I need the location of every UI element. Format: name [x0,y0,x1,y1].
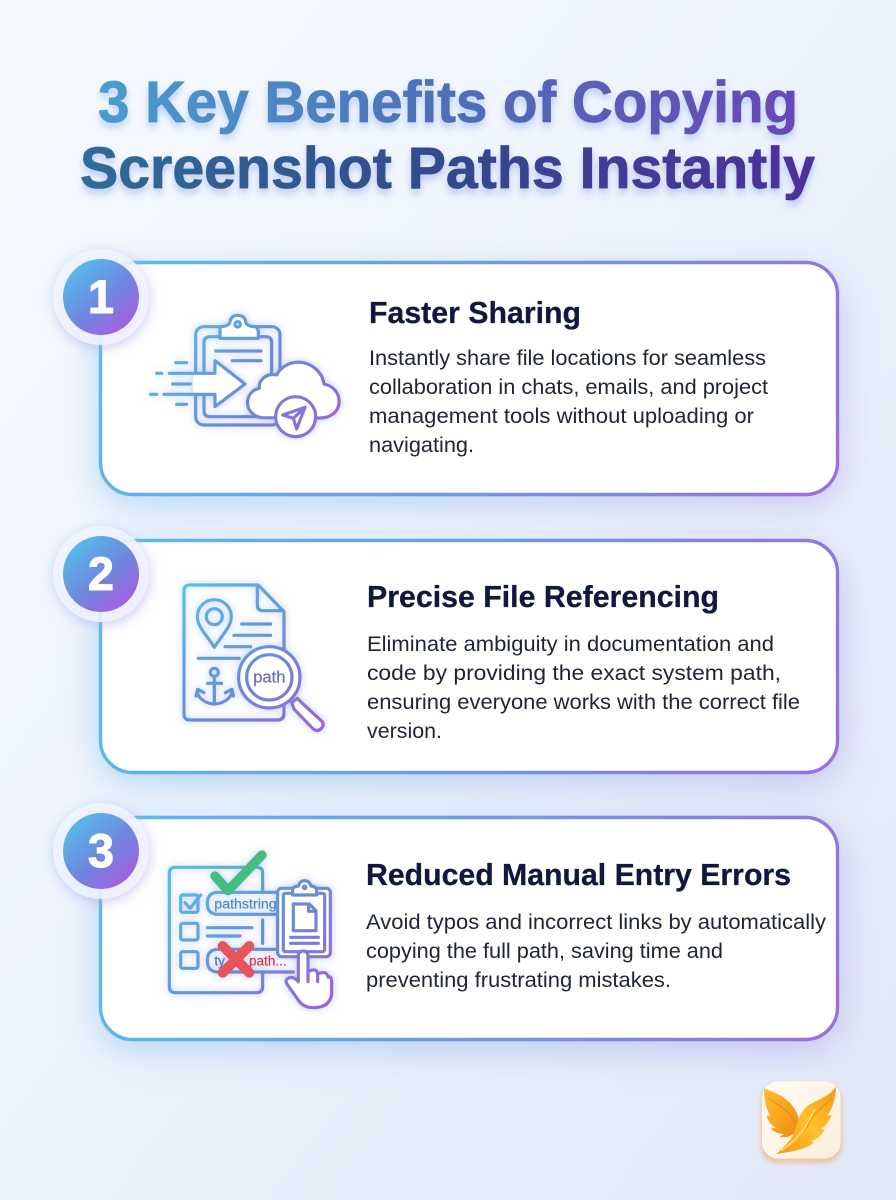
badge: number 1 [52,249,150,348]
badge: number 3 [52,803,150,902]
icon text: pathstring: pathstring [214,896,277,911]
icon label: path: path [253,668,286,687]
icon: checklist with clipboard and pointer [169,855,332,1008]
badge: number 1: 1 [88,270,114,323]
badge: number 3: 3 [88,824,114,877]
title: 3 Key Benefits of Copying [98,70,798,135]
panel: faster sharing [52,249,840,504]
text: reduced manual entry errors description [366,910,826,992]
icon text: ty: ty [214,953,225,968]
text: precise file referencing description: version. [367,719,442,743]
icon text: red path: path... [249,953,287,968]
icon: green check [215,855,262,891]
icon: clipboard with arrow and cloud [151,315,339,437]
text: faster sharing description: management tools without uploading or [369,404,754,428]
text: precise file referencing description: ensuring everyone works with the correct file [367,690,800,714]
text: faster sharing description: navigating. [369,433,474,457]
heading: precise file referencing: Precise File Referencing [367,579,719,614]
icon: red cross [223,946,249,973]
panel: precise file referencing [52,526,840,782]
text: precise file referencing description: Eliminate ambiguity in documentation and [367,632,774,656]
text: faster sharing description: collaboration in chats, emails, and project [369,375,768,399]
title: Screenshot Paths Instantly [80,136,815,201]
title [80,70,815,206]
badge: number 2 [52,526,150,625]
logo: orange wings app icon [761,1081,842,1163]
panel: reduced manual entry errors [52,803,840,1049]
heading: faster sharing: Faster Sharing [369,295,581,330]
text: precise file referencing description [367,632,800,743]
text: precise file referencing description: code by providing the exact system path, [367,661,781,685]
icon: document with pin, anchor and magnifier [184,585,323,730]
text: reduced manual entry errors description: copying the full path, saving time and [366,939,723,963]
badge: number 2: 2 [88,547,114,600]
text: faster sharing description: Instantly share file locations for seamless [369,346,766,370]
title: 3 Key Benefits of Copying [98,75,798,140]
text: faster sharing description [369,346,768,457]
heading: reduced manual entry errors: Reduced Manual Entry Errors [366,857,791,892]
text: reduced manual entry errors description: preventing frustrating mistakes. [366,968,671,992]
title: Screenshot Paths Instantly [80,141,815,206]
text: reduced manual entry errors description: Avoid typos and incorrect links by automatically [366,910,826,934]
